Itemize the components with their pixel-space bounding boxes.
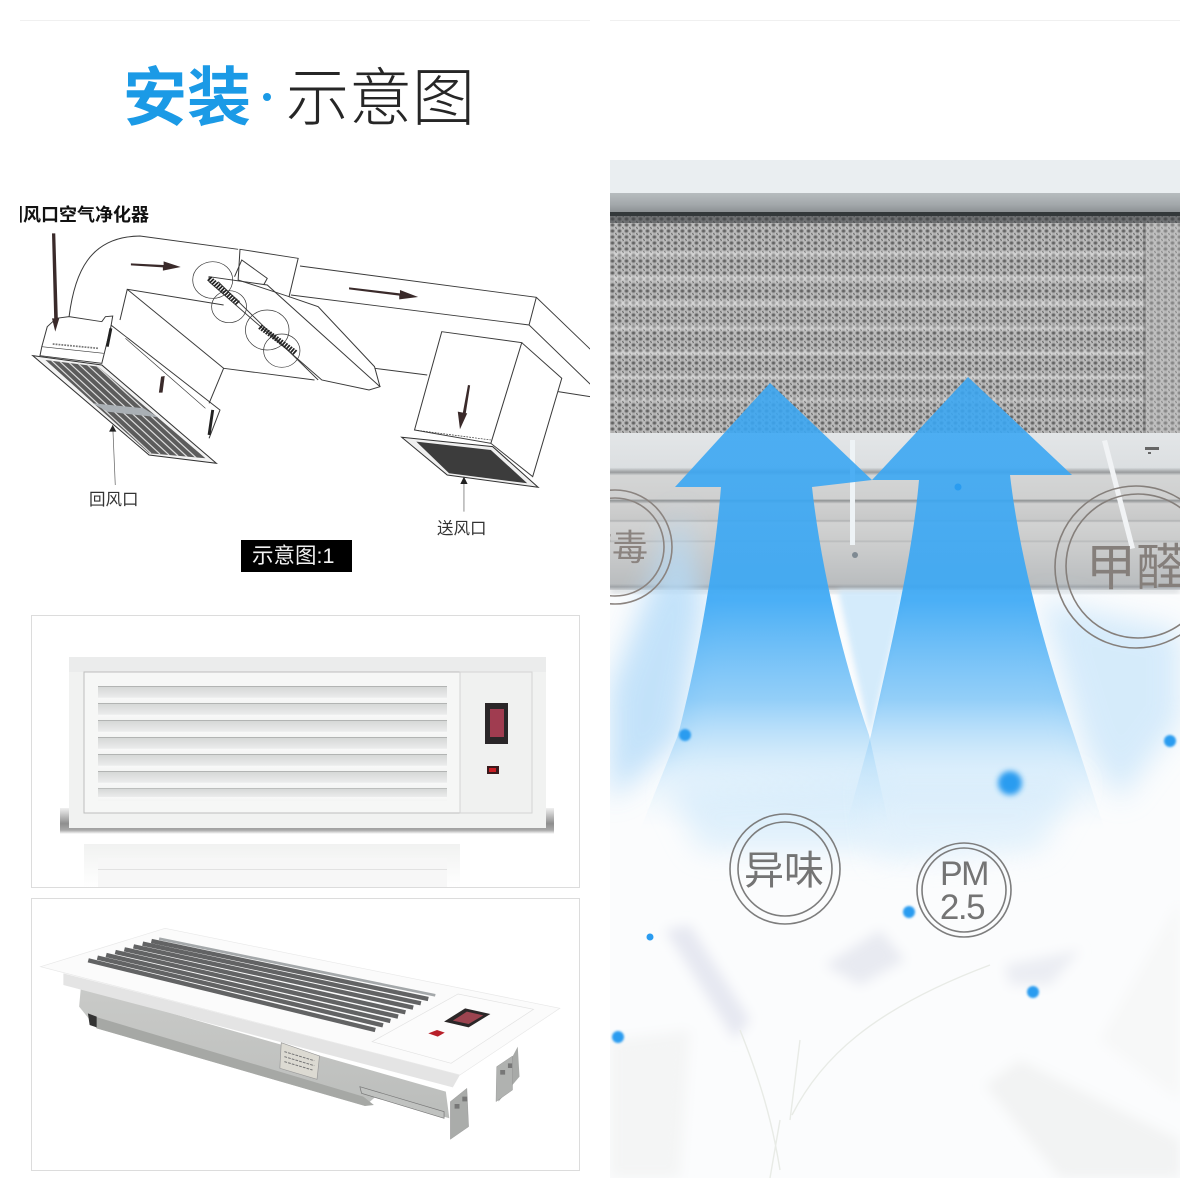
faded flowers [665,925,1080,1178]
blue smoke haze [610,510,1180,860]
badge: PM2.5: 2.5 [940,888,984,927]
badge: virus [610,489,673,605]
panel: airflow purification photo [610,160,1180,1178]
pollutant dots [612,484,1176,1043]
badge: odor [730,814,840,924]
outer frame [69,657,546,828]
duct line drawing [40,236,594,477]
badge: PM2.5: PM [940,855,988,893]
face plate [41,928,560,1075]
leader lines [109,425,468,512]
rocker switch [428,1030,445,1037]
badge: virus: 病毒 [576,527,648,568]
title [123,62,475,134]
metal housing [79,987,449,1118]
rating label [280,1043,319,1079]
badge: PM2.5 [917,843,1011,937]
display [444,1008,490,1027]
badge: odor: 异味 [744,849,824,893]
diagram caption: 示意图:1 [252,544,334,568]
base shadow [60,808,554,834]
installation diagram [5,204,594,512]
flow arrows [52,233,470,429]
slide rail [360,1087,444,1118]
grille slots [88,939,435,1030]
badge: formaldehyde [1054,485,1180,649]
panel: front product photo [32,616,580,888]
display switch [485,703,508,744]
supply air grille [402,437,538,487]
grille frame [84,672,460,813]
louvers [98,686,447,801]
label: return air purifier: 回风口空气净化器 [5,204,149,225]
panel: angled product photo [32,898,580,1170]
room background [610,160,1180,1178]
label: supply air vent: 送风口 [437,519,486,538]
reflection [84,844,460,870]
return air grille [33,356,216,463]
filter mesh [610,216,1180,434]
diagram caption [241,540,352,572]
ceiling strip [610,160,1180,193]
bracket bolts [455,1063,512,1109]
rear bracket [498,1047,520,1102]
metal frame [610,193,1180,212]
vent louvers [610,433,1180,593]
label: return air vent: 回风口 [89,491,138,509]
title: 安装 [123,62,251,134]
badge: formaldehyde: 甲醛 [1086,540,1186,596]
airflow arrows [640,377,1105,830]
indicator [487,766,499,774]
title: 示意图 [286,64,475,134]
front bracket [450,1088,469,1139]
control panel [460,672,532,813]
face plate edge [63,973,460,1087]
faded bottom shapes [610,900,1180,1178]
